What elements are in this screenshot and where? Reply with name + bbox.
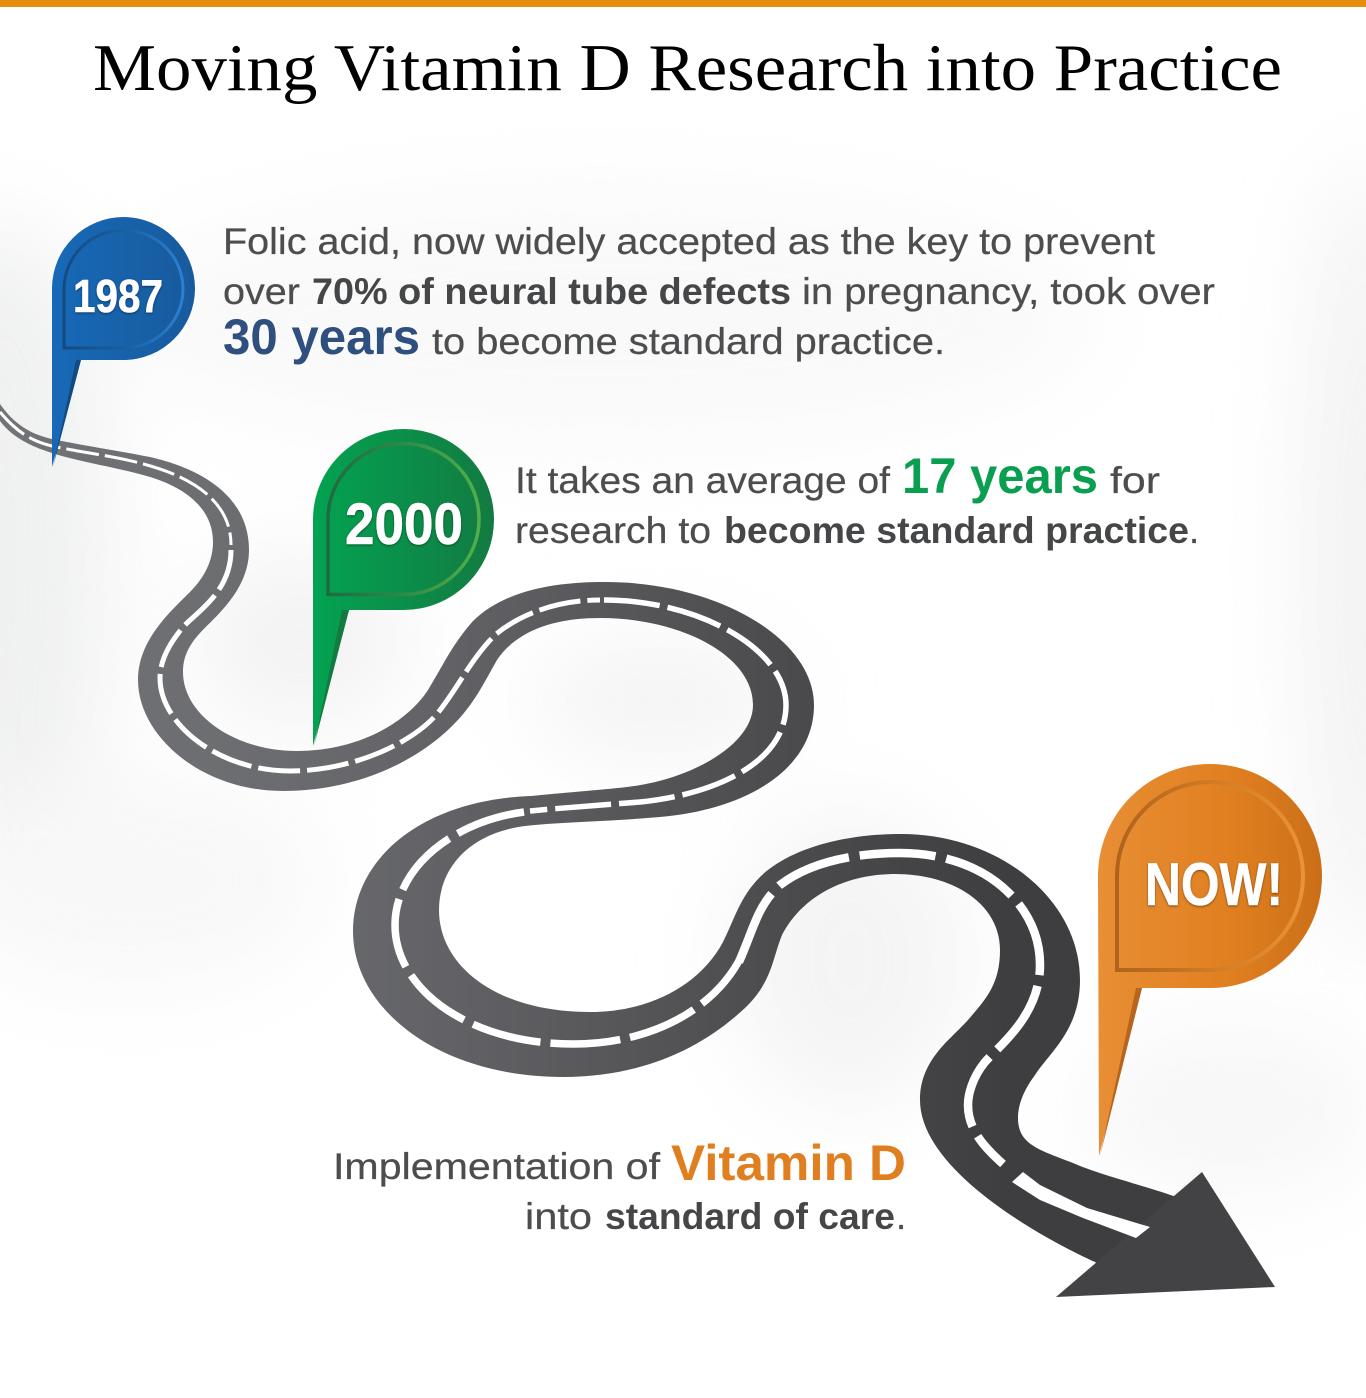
- pin: 2000: 2000: [345, 492, 463, 557]
- road centre dashes: last hump: [739, 853, 1040, 1164]
- text block: 17 years: for: [1110, 460, 1160, 501]
- road centre dashes: first stretch: [0, 412, 231, 545]
- road centre dashes: lower loop: [395, 812, 742, 1044]
- text block: folic acid: Folic acid, now widely accepted as the key to prevent: [223, 221, 1156, 262]
- text block: 17 years: .: [1189, 510, 1199, 551]
- text block: folic acid: 70% of neural tube defects: [312, 271, 791, 312]
- text block: vitamin D: [333, 1135, 906, 1237]
- pin: NOW: NOW!: [1145, 851, 1283, 918]
- text block: vitamin D: Implementation of: [333, 1146, 661, 1187]
- road centre dashes: upper loop: [530, 600, 786, 811]
- top accent bar: [0, 0, 1366, 7]
- arrowhead: [1056, 1172, 1275, 1297]
- text block: folic acid: 30 years: [223, 309, 420, 365]
- title: Moving Vitamin D Research into Practice: [93, 31, 1282, 105]
- text block: vitamin D: .: [896, 1196, 906, 1237]
- text block: 17 years: research to: [515, 510, 711, 551]
- text block: folic acid: to become standard practice.: [432, 321, 945, 362]
- text block: folic acid: [223, 221, 1215, 365]
- text block: 17 years: It takes an average of: [515, 460, 891, 501]
- text block: 17 years: become standard practice: [724, 510, 1189, 551]
- text block: 17 years: [515, 448, 1199, 551]
- text block: vitamin D: standard of care: [605, 1196, 895, 1237]
- text block: folic acid: over: [223, 271, 300, 312]
- pin: 2000: [313, 429, 494, 746]
- final road dash over arrow: [1012, 1172, 1150, 1238]
- pin: 1987: 1987: [73, 270, 163, 322]
- text block: vitamin D: into: [525, 1196, 592, 1237]
- text block: folic acid: in pregnancy, took over: [802, 271, 1215, 312]
- pin: NOW: [1098, 764, 1322, 1156]
- pin: 1987: [52, 217, 195, 467]
- text block: 17 years: 17 years: [902, 448, 1098, 504]
- road centre dashes: second stretch: [160, 550, 600, 771]
- road surface: [0, 404, 1185, 1278]
- winding road with arrow: [0, 404, 1275, 1297]
- text block: vitamin D: Vitamin D: [671, 1135, 906, 1191]
